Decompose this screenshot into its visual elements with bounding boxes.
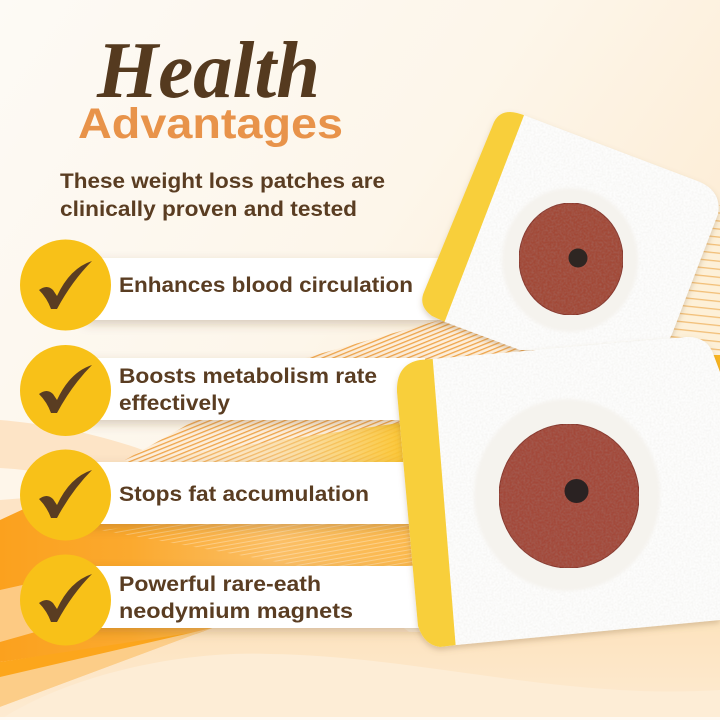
patch 1 red pad xyxy=(519,203,623,315)
patch 2 yellow strip xyxy=(396,358,456,647)
patch: upper magnetic patch xyxy=(419,112,720,352)
benefit bar: Powerful magnets xyxy=(20,554,430,646)
patch 1 magnet xyxy=(568,248,588,268)
icon: check badge 4 xyxy=(20,554,111,646)
benefit bar: Powerful magnets: Powerful rare-eath xyxy=(119,572,321,596)
patch: lower magnetic patch xyxy=(390,330,720,655)
title: Advantages: Advantages xyxy=(78,100,343,148)
benefit bar: Stops fat accumulation: Stops fat accumulation xyxy=(119,482,369,506)
benefit bar: Enhances blood circulation xyxy=(20,240,450,330)
benefit bar: Enhances blood circulation: Enhances blood circulation xyxy=(119,273,413,297)
patch 1 yellow strip xyxy=(422,112,524,322)
benefit bar: Boosts metabolism rate: effectively xyxy=(119,391,230,415)
subtitle text xyxy=(60,169,385,221)
patch 2 magnet xyxy=(564,479,588,503)
benefit bar: Powerful magnets: neodymium magnets xyxy=(119,599,353,623)
patch 2 ring xyxy=(474,399,660,591)
patch 2 red pad xyxy=(499,424,639,568)
icon: check badge 1 xyxy=(20,240,111,330)
icon: check badge 3 xyxy=(20,450,111,540)
subtitle text: clinically proven and tested xyxy=(60,197,357,221)
title: Health: Health xyxy=(96,25,320,115)
benefit bar: Boosts metabolism rate: Boosts metabolism rate xyxy=(119,364,377,388)
patch 1 ring xyxy=(502,188,638,332)
benefit bar: Boosts metabolism rate xyxy=(20,345,425,436)
subtitle text: These weight loss patches are xyxy=(60,169,385,193)
icon: check badge 2 xyxy=(20,345,111,436)
benefit bar: Stops fat accumulation xyxy=(20,450,425,540)
